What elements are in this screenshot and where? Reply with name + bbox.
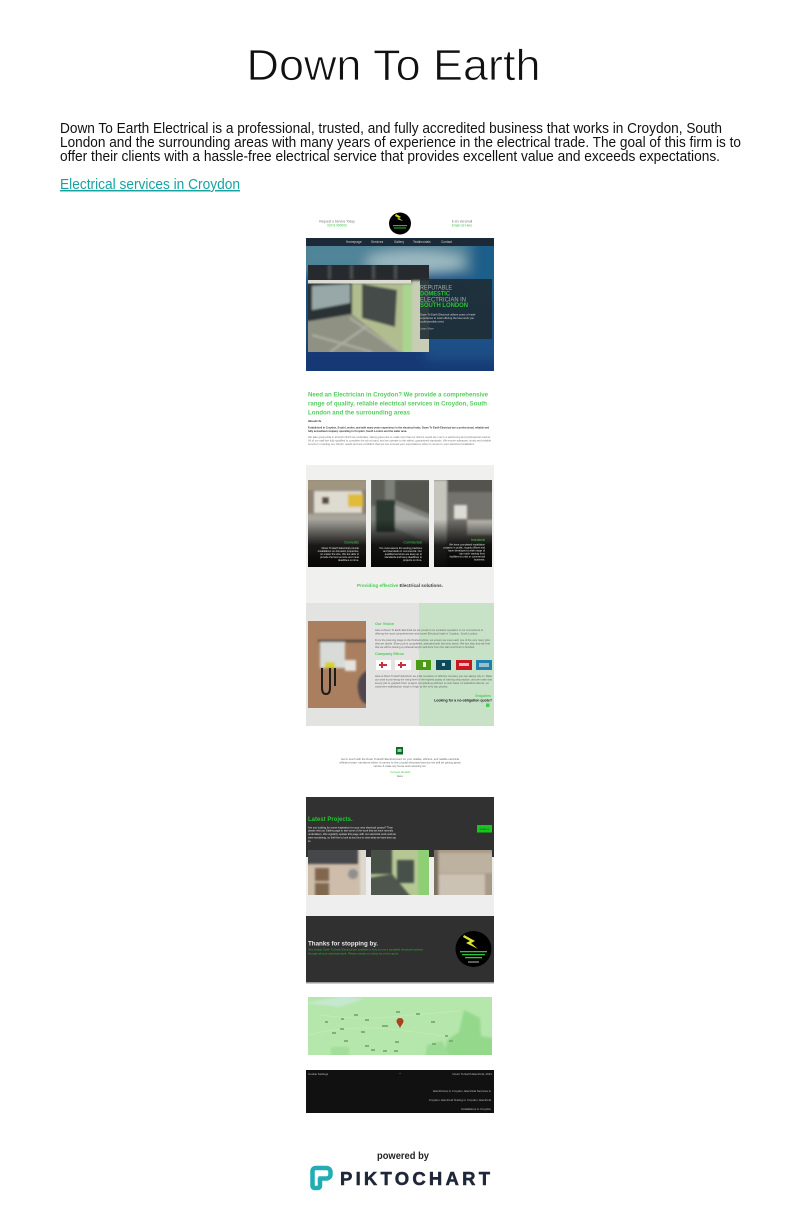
vision text: that we tackle. Every job is completed, attended with the best result. We are skip and we feel: [375, 642, 490, 646]
service card 2: You must assure the testing practices: [379, 546, 423, 550]
hero text panel: REPUTABLE: [420, 284, 452, 292]
footer: Croydon, Electrical Testing in Croydon, Electrical: [429, 1098, 491, 1102]
website screenshot: [306, 212, 494, 1113]
about section: All of our staff are fully qualified to complete the job at hand, and we operate to the safest, guaranteed standards. We ensure adequate, timely and reliable: [308, 438, 491, 442]
ethos text: [375, 674, 492, 707]
intro paragraph: [60, 121, 741, 165]
footer: ^: [399, 1072, 401, 1076]
navigation bar: Testimonials: [413, 240, 431, 244]
navigation bar: Contact: [441, 240, 452, 244]
company logo: [456, 931, 492, 967]
service card 3: projects in public, supply offices and: [444, 546, 486, 550]
latest projects: [304, 797, 495, 916]
intro paragraph: Down To Earth Electrical is a professional, trusted, and fully accredited business that works in Croydon, South: [60, 121, 722, 137]
service card 1: no matter the size. We are able to: [320, 552, 360, 556]
about section: service in meeting our clients' needs and are confident that we can exceed your expectations when it comes to your electrical installation.: [308, 442, 475, 446]
service card 1: installations on domestic properties,: [318, 549, 359, 553]
thanks section: [306, 916, 494, 984]
service card 2: standards and keep deadlines to: [384, 555, 423, 559]
service card 2: [371, 478, 432, 567]
service card 1: deadlines on time.: [338, 558, 359, 562]
service card 3: facilities to units or commercial: [450, 554, 485, 558]
ethos text: our work is promising the rising level of the highest quality of training and practice, and we make that: [375, 678, 492, 682]
accreditation logos: [376, 660, 492, 670]
view button: Gallery: [480, 827, 490, 831]
service card 1: Down To Earth Electrical provide: [322, 546, 360, 550]
vision text: From the planning stage to the finished article, we ensure we meet each one of the very many jobs: [375, 638, 491, 642]
latest projects: Are you looking for some inspiration for your next electrical project? Then: [308, 826, 393, 830]
thanks section: through all your electrical work. Please contact us today for a free quote.: [308, 952, 399, 956]
site header: E-Us via email: [452, 220, 473, 224]
about section: We take great pride in all work which we undertake, taking great care to make sure that our client's needs are met in a welcoming and professional manner.: [308, 435, 491, 439]
footer: [306, 1070, 494, 1113]
icon: contact: [396, 747, 403, 754]
vision text: Company Ethos: [375, 652, 404, 656]
site header: Request a Service Today: [319, 220, 355, 224]
service card 3: business.: [474, 558, 485, 562]
service card 3: have developed a wide range of: [448, 548, 485, 552]
footer: Installations in Croydon: [461, 1107, 491, 1111]
service card 2: Commercial: [403, 540, 422, 544]
vision text: offering the most comprehensive and expert Electrical trade in Croydon, South London.: [375, 632, 478, 636]
contact prompt: [306, 726, 494, 797]
services section: [304, 465, 494, 603]
ethos text: Looking for a no-obligation quote?: [434, 698, 492, 702]
footer: Cookie Settings: [308, 1072, 329, 1076]
contact prompt: Contact Details: [390, 770, 411, 774]
hero text panel: [420, 279, 492, 339]
hero text panel: Down To Earth Electrical utilises years of trade: [420, 312, 476, 316]
site header: Email Us Here: [452, 224, 472, 228]
intro paragraph: offer their clients with a hassle-free electrical service that provides excellent value and exceeds expectations.: [60, 149, 720, 165]
about section: Need an Electrician in Croydon? We provide a comprehensive: [308, 392, 489, 398]
hero photo: [308, 265, 429, 352]
contact prompt: Get in touch with the Down To Earth Electrical team for your reliable, efficient, and reliable electrical: [341, 757, 459, 761]
service card 3: We have completed installation: [449, 542, 486, 546]
hero text panel: experience to work offering the best work you: [420, 316, 475, 320]
ethos text: Here at Down To Earth Electrical, we pride ourselves on effective company you can always rely on. Make: [375, 674, 492, 678]
about section: [306, 371, 494, 465]
service card 1: [308, 480, 366, 567]
ethos text: every job is guided from project completing without a cost base of satisfied clients, so: [375, 681, 490, 685]
vision text: that we will be leaving a professional job well done from the start and finish to finished.: [375, 645, 475, 649]
about section: fully accredited company operating in Croydon, South London and the wider area.: [308, 429, 407, 433]
contact prompt: efficient team members when it comes to the crucial electrical service we will be giving great: [340, 760, 461, 764]
contact prompt: Here: [397, 774, 403, 778]
wordmark: PIKTOCHART: [340, 1168, 491, 1189]
navigation bar: [306, 238, 494, 246]
footer: Down To Earth Electrical, 2021: [453, 1072, 492, 1076]
icon: piktochart mark: [312, 1168, 330, 1188]
latest projects: undertaken. We regularly update this page with our electrical work and we: [308, 832, 396, 836]
piktochart logo: [312, 1168, 491, 1189]
service card 2: qualified services are keep up to: [385, 552, 423, 556]
latest projects: please visit our Gallery page to see some of the work that we have recently: [308, 828, 393, 832]
footer: Electricians in Croydon, Electrical Services in: [433, 1089, 491, 1093]
title: Down To Earth: [246, 41, 540, 90]
vision text: [375, 622, 491, 656]
latest projects: were wondering, so feel free to look at any time to view what we have been up: [308, 836, 396, 840]
hero text panel: DOMESTIC: [420, 290, 450, 298]
link: electrical services: Electrical services in Croydon: [60, 177, 240, 193]
project photo 3: [434, 850, 492, 895]
vision text: Here at Down To Earth Electrical we are proud of our excellent reputation in our commitment to: [375, 628, 483, 632]
project photo 2: [371, 850, 429, 895]
about section: London and the surrounding areas: [308, 410, 411, 416]
service card 3: Industrial: [471, 538, 485, 542]
ethos text: customer satisfaction stays in high at the very top priority.: [375, 684, 448, 688]
project photo 1: [308, 850, 366, 895]
about section: Established in Croydon, South London, and with many years experience in the electrical trade, Down To Earth Electrical are a professional, reliable and: [308, 426, 489, 430]
latest projects: to.: [308, 839, 311, 843]
service card 1: provide the best service and meet: [320, 555, 359, 559]
thanks section: Thanks for stopping by.: [308, 942, 378, 948]
tagline: Providing effective Electrical solutions.: [357, 583, 443, 588]
service card 1: Domestic: [344, 540, 359, 544]
hero text panel: SOUTH LONDON: [420, 302, 469, 309]
intro paragraph: London and the surrounding areas with many years of experience in the electrical trade. The goal of this firm is to: [60, 135, 741, 151]
service card 3: top notch varying from: [459, 552, 485, 556]
service card 2: and standards in commercial. Our: [383, 549, 422, 553]
service card 3: [432, 478, 494, 567]
view button: [477, 825, 492, 832]
navigation bar: Gallery: [394, 240, 405, 244]
hero text panel: could possibly need.: [420, 319, 445, 323]
about section: range of quality, reliable electrical services in Croydon, South: [308, 400, 487, 408]
service card 2: projects on time.: [403, 558, 422, 562]
vision section: [306, 603, 494, 726]
about section: About Us: [308, 419, 322, 423]
hero banner: [306, 246, 494, 371]
meter photo: [308, 621, 368, 708]
site header: [306, 210, 494, 238]
site header: 020 8 000000: [327, 224, 347, 228]
map: [308, 997, 492, 1055]
vision text: Our Vision: [375, 622, 395, 626]
hero text panel: Learn More: [420, 326, 434, 330]
navigation bar: Homepage: [346, 240, 362, 244]
latest projects: Latest Projects.: [308, 817, 353, 823]
ethos text: Enquiries: [476, 694, 491, 698]
contact prompt: service & make any house work amazing too.: [374, 764, 427, 768]
powered by label: powered by: [377, 1151, 429, 1162]
hero text panel: ELECTRICIAN IN: [420, 296, 466, 304]
map pin: [396, 1018, 404, 1028]
navigation bar: Services: [371, 240, 384, 244]
thanks section: Very simply, Down To Earth Electrical are available to help you as a reputable electrical business: [308, 948, 424, 952]
